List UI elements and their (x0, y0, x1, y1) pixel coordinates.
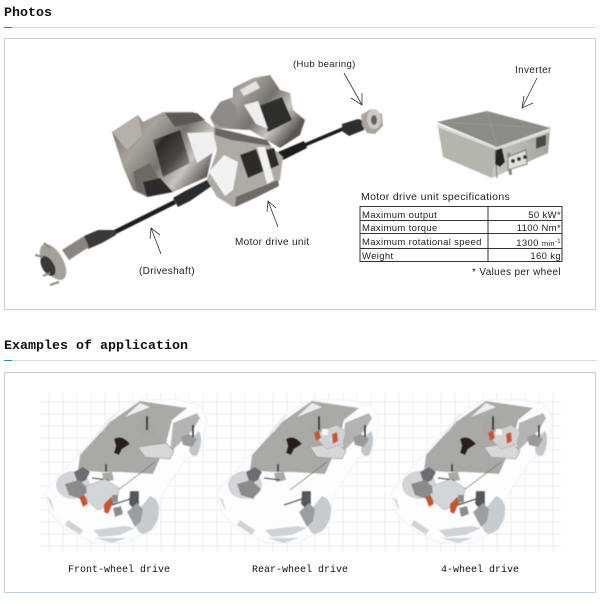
table: specifications (360, 206, 562, 262)
footnote: * Values per wheel (472, 267, 561, 278)
label: driveshaft: (Driveshaft) (139, 266, 195, 277)
label: inverter: Inverter (515, 65, 552, 76)
table: specifications: 1100 Nm* (517, 223, 561, 234)
gearbox (207, 127, 283, 207)
label: motor drive unit: Motor drive unit (235, 237, 310, 248)
label: inverter (515, 65, 552, 108)
panel: examples of application (4, 372, 596, 592)
heading: Examples of application: Examples of application (4, 339, 188, 354)
car: 4-wheel drive (391, 399, 553, 543)
table: specifications: Maximum torque (362, 223, 438, 234)
driveshaft left (34, 177, 216, 285)
table: specifications: Weight (362, 251, 394, 262)
car: rear-wheel drive (217, 399, 379, 543)
label: hub bearing: (Hub bearing) (293, 59, 356, 70)
heading rule (4, 360, 597, 362)
caption: 4-wheel drive: 4-wheel drive (441, 564, 519, 576)
table: specifications: 50 kW* (528, 210, 561, 221)
photo: motor drive unit (34, 75, 383, 285)
grid background (40, 393, 561, 551)
label: motor drive unit (235, 201, 310, 248)
car: front-wheel drive (45, 399, 207, 543)
table: specifications: -1 (555, 239, 561, 245)
driveshaft right and hub bearing (278, 109, 383, 160)
label: driveshaft (139, 228, 195, 277)
table: specifications: 1300 min (516, 238, 555, 249)
label: hub bearing (293, 59, 362, 105)
right motor (210, 75, 305, 148)
caption: rear-wheel drive: Rear-wheel drive (252, 564, 348, 576)
heading: Photos: Photos (4, 6, 52, 21)
photo: inverter (437, 111, 551, 178)
left motor (112, 112, 217, 197)
table: specifications: 160 kg (530, 251, 561, 262)
heading rule (4, 26, 597, 28)
panel: photos (4, 38, 596, 310)
table: specifications: Maximum rotational speed (362, 237, 482, 248)
table: specifications: Maximum output (362, 210, 437, 221)
caption: front-wheel drive: Front-wheel drive (68, 564, 170, 576)
spec title: Motor drive unit specifications (361, 191, 510, 203)
